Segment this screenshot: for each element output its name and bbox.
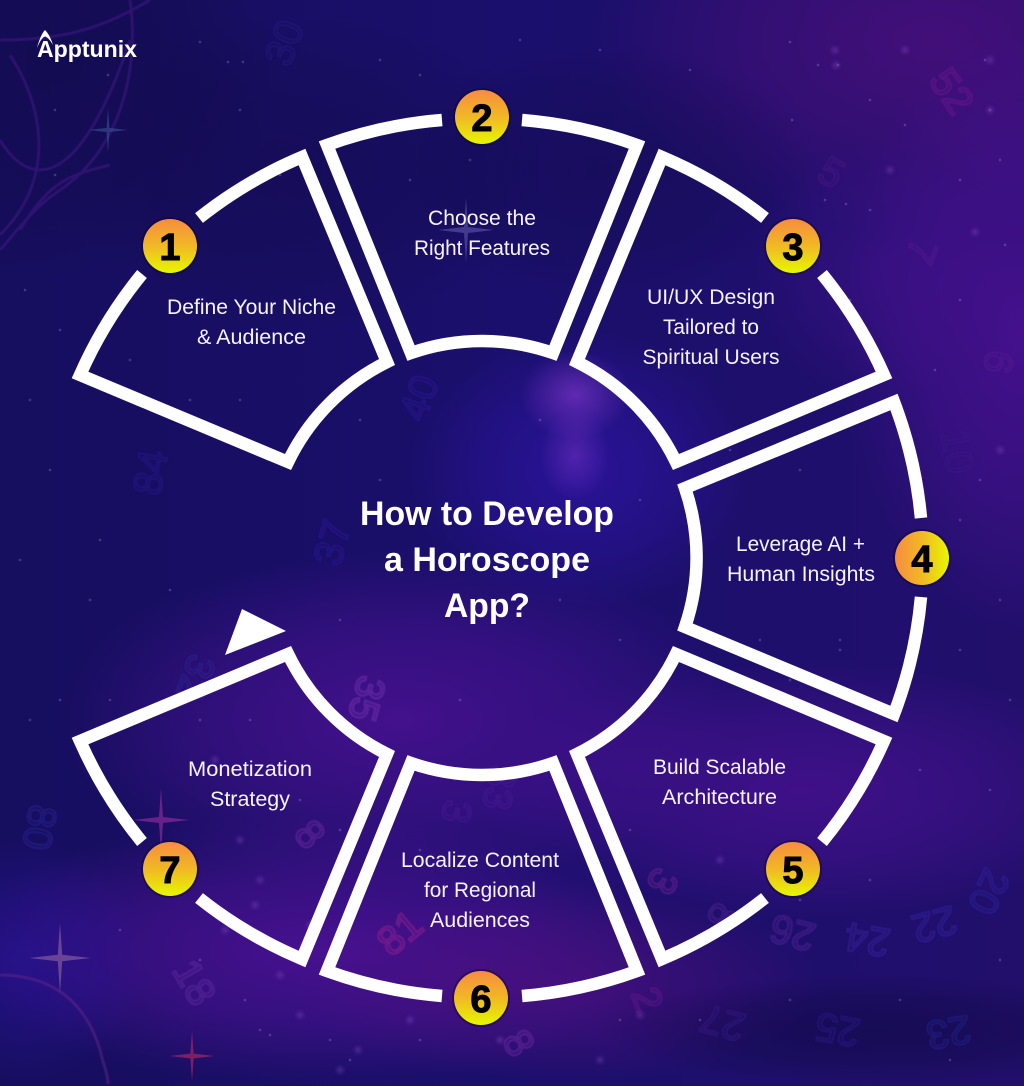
- badge: step 1: 1: [159, 227, 181, 269]
- background: faint numerals: 5: [810, 148, 852, 198]
- background: faint numerals: 35: [339, 671, 393, 726]
- background: faint numerals: 52: [920, 61, 982, 122]
- background: faint numerals: 40: [392, 370, 448, 426]
- title: [360, 495, 614, 625]
- background: faint numerals: 22: [907, 897, 961, 951]
- text: step 5 label: [653, 756, 786, 809]
- background: faint numerals: 80: [14, 802, 65, 853]
- panel: step 4 frame: [685, 402, 921, 714]
- panel: step 1 frame: [80, 157, 387, 462]
- badge: step 6: [452, 969, 510, 1027]
- badge: step 2: [453, 88, 511, 146]
- background: faint numerals: 23: [923, 1006, 974, 1057]
- text: step 2 label: [414, 207, 550, 260]
- background: faint numerals: 10: [931, 426, 982, 477]
- badge: step 6: 6: [470, 979, 492, 1021]
- background: faint numerals: 84: [125, 447, 176, 498]
- background: faint numerals: 20: [959, 862, 1018, 921]
- background: faint numerals: 8: [494, 1022, 543, 1064]
- background: faint numerals: 8: [285, 812, 333, 857]
- background: faint numerals: 3: [432, 797, 480, 826]
- title: How to Develop: [360, 495, 614, 533]
- background: faint numerals: 18: [164, 952, 224, 1013]
- background: faint numerals: 2: [622, 981, 671, 1017]
- text: step 4 label: Leverage AI +: [736, 533, 865, 556]
- panel: step 7 frame: [80, 654, 387, 959]
- text: step 3 label: Tailored to: [663, 316, 759, 339]
- text: step 2 label: Choose the: [428, 207, 536, 230]
- background: faint numerals: 26: [766, 905, 820, 959]
- text: step 3 label: Spiritual Users: [642, 346, 780, 369]
- background: faint numerals: 3: [637, 860, 687, 902]
- background: zodiac chart curves: [0, 0, 150, 1084]
- background: faint numerals: 6: [974, 347, 1022, 377]
- badge: step 7: [141, 840, 199, 898]
- text: step 6 label: Audiences: [430, 909, 530, 932]
- text: step 6 label: for Regional: [424, 879, 536, 902]
- badge: step 3: 3: [782, 227, 804, 269]
- panel: step 3 frame: [577, 157, 884, 462]
- text: step 3 label: [642, 286, 780, 369]
- badge: step 4: 4: [911, 539, 933, 581]
- background: faint numerals: 30: [257, 15, 313, 71]
- text: step 6 label: [401, 849, 559, 932]
- panel: step 6 frame: [327, 763, 637, 996]
- background: faint numerals: 81: [369, 902, 431, 965]
- panel: step 2 frame: [327, 120, 637, 353]
- text: step 6 label: Localize Content: [401, 849, 559, 872]
- text: step 7 label: Strategy: [210, 788, 290, 811]
- background: faint numerals: 37: [306, 516, 360, 570]
- background: faint numerals: 32: [167, 649, 223, 705]
- background: top rule line: [150, 14, 1024, 18]
- text: step 2 label: Right Features: [414, 237, 550, 260]
- badge: step 7: 7: [159, 850, 181, 892]
- text: step 7 label: [188, 758, 312, 811]
- background: faint numerals: 8: [697, 896, 747, 937]
- background: sparkle stars: [29, 108, 494, 1082]
- logo: Apptunix: Apptunix: [37, 36, 137, 62]
- badge: step 5: [764, 840, 822, 898]
- title: App?: [444, 587, 530, 625]
- badge: step 4: [893, 529, 951, 587]
- background: faint numerals: 27: [696, 995, 750, 1049]
- background: faint numerals: 24: [842, 914, 893, 965]
- background: faint numerals: 7: [897, 234, 945, 269]
- panel: step 5 frame: [577, 654, 884, 959]
- background: faint numerals: 25: [812, 1004, 863, 1055]
- text: step 3 label: UI/UX Design: [647, 286, 775, 309]
- badge: step 5: 5: [782, 850, 804, 892]
- text: step 5 label: Architecture: [662, 786, 777, 809]
- text: step 1 label: & Audience: [197, 326, 306, 349]
- text: step 4 label: Human Insights: [727, 563, 875, 586]
- background: faint numerals: 33: [474, 762, 525, 813]
- text: step 7 label: Monetization: [188, 758, 312, 781]
- title: a Horoscope: [384, 541, 590, 579]
- text: step 1 label: Define Your Niche: [167, 296, 336, 319]
- arrow: cycle pointer: [225, 609, 286, 655]
- text: step 5 label: Build Scalable: [653, 756, 786, 779]
- text: step 4 label: [727, 533, 875, 586]
- text: step 1 label: [167, 296, 336, 349]
- badge: step 2: 2: [471, 98, 493, 140]
- badge: step 1: [141, 217, 199, 275]
- badge: step 3: [764, 217, 822, 275]
